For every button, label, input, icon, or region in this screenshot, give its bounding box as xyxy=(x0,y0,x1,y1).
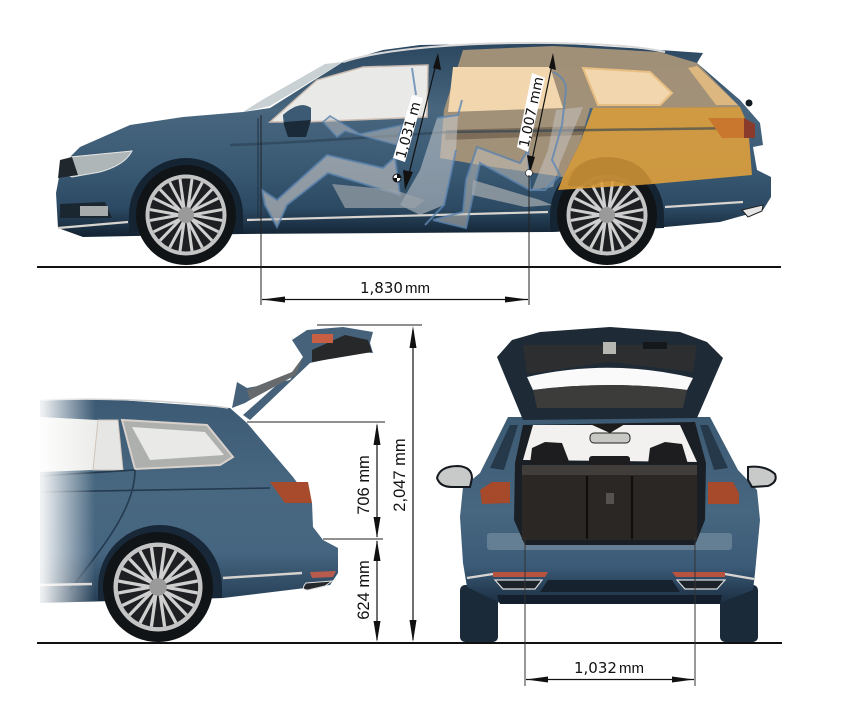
mirror inside xyxy=(590,433,630,443)
dimension: 706 mm: 706 mm xyxy=(355,455,373,515)
front occupant torso xyxy=(412,68,462,225)
rear body xyxy=(460,417,760,603)
gate opening xyxy=(527,368,693,390)
wing mirror xyxy=(283,105,311,137)
rear body xyxy=(40,399,338,603)
measure: rear seat height: 1,007 mm xyxy=(517,75,547,149)
panel: side view with seating positions xyxy=(37,43,781,305)
front seat cushion xyxy=(332,184,425,208)
panel: rear view with open boot xyxy=(437,327,776,686)
handle xyxy=(643,342,667,349)
left mirror xyxy=(437,466,472,487)
dimension: 2,047 mm xyxy=(391,326,416,642)
windscreen highlight xyxy=(243,62,343,112)
luggage compartment orange xyxy=(558,107,752,190)
fade to white xyxy=(30,395,95,607)
rear occupant torso xyxy=(530,72,566,190)
chrome sill xyxy=(40,573,302,585)
right tail light xyxy=(708,482,739,504)
exhaust xyxy=(742,205,763,217)
rear headrests xyxy=(530,442,688,465)
side glass xyxy=(490,425,728,470)
tinted rear screen xyxy=(688,66,738,105)
dimension: 706 mm xyxy=(355,423,380,538)
dimension: 2,047 mm: 2,047 mm xyxy=(391,438,409,512)
front seat back xyxy=(400,115,458,215)
ground line top xyxy=(37,266,781,268)
orange wheel arch xyxy=(568,157,652,187)
dimension: 1,830 mm xyxy=(261,115,529,305)
door seam and waist line xyxy=(40,470,270,590)
aerial dot xyxy=(746,100,752,106)
dimension: 624 mm xyxy=(355,540,380,642)
underbody shadow xyxy=(497,595,722,604)
folded seat backs xyxy=(522,465,697,540)
quarter window xyxy=(122,420,233,469)
cabin band below rear window xyxy=(445,126,590,140)
tail light xyxy=(708,118,755,138)
sill chrome xyxy=(58,202,743,228)
dimension: 1,032 mm xyxy=(525,537,695,686)
left tail light xyxy=(480,482,510,504)
diffuser xyxy=(540,580,680,592)
front occupant leg xyxy=(262,155,400,227)
front grille xyxy=(58,157,78,178)
front side window xyxy=(270,65,428,122)
rear door window xyxy=(448,67,563,112)
rear seat cushion xyxy=(472,180,552,207)
exhaust tip xyxy=(303,581,332,590)
door seam xyxy=(257,118,259,225)
headlight xyxy=(62,151,132,177)
VW badge xyxy=(603,342,616,354)
measure: front seat height: 1,031 m xyxy=(393,100,424,160)
character line xyxy=(230,128,740,145)
roof rail xyxy=(343,43,665,62)
rear door window xyxy=(40,417,98,472)
parcel shelf xyxy=(533,385,687,408)
fog lamp xyxy=(60,202,112,218)
dimension: 624 mm: 624 mm xyxy=(355,560,373,620)
measure: front seat height xyxy=(393,53,441,190)
tyres xyxy=(460,585,758,642)
ground line bottom xyxy=(37,642,782,644)
exhaust outlets xyxy=(495,580,725,589)
rear quarter window xyxy=(583,68,672,105)
rear occupant leg xyxy=(433,147,530,228)
measure: rear seat height xyxy=(517,53,556,176)
rear wheel xyxy=(103,532,213,642)
car body side view xyxy=(56,43,771,237)
panel: rear three-quarter view with open tailgate xyxy=(30,325,782,644)
dimension lines xyxy=(247,325,422,539)
front occupant arm xyxy=(323,116,402,145)
front wheel xyxy=(136,165,236,265)
tail light xyxy=(270,482,312,503)
tailgate lamp xyxy=(312,334,333,343)
rear wheel xyxy=(557,165,657,265)
tailgate xyxy=(497,327,723,420)
dimension: 1,032 mm: 1,032mm xyxy=(574,659,644,677)
number plate recess band xyxy=(487,533,732,550)
boot surround xyxy=(514,422,706,545)
rear seat back xyxy=(532,107,583,190)
wheel arches side view xyxy=(129,158,664,233)
rear window xyxy=(523,425,697,462)
right mirror xyxy=(748,467,776,487)
cabin luggage tint xyxy=(440,46,740,177)
dimension: 1,830 mm: 1,830mm xyxy=(360,279,430,297)
wheel arch xyxy=(98,525,222,601)
roof highlight xyxy=(42,399,228,408)
bumper band xyxy=(467,574,754,579)
open tailgate xyxy=(232,327,373,420)
